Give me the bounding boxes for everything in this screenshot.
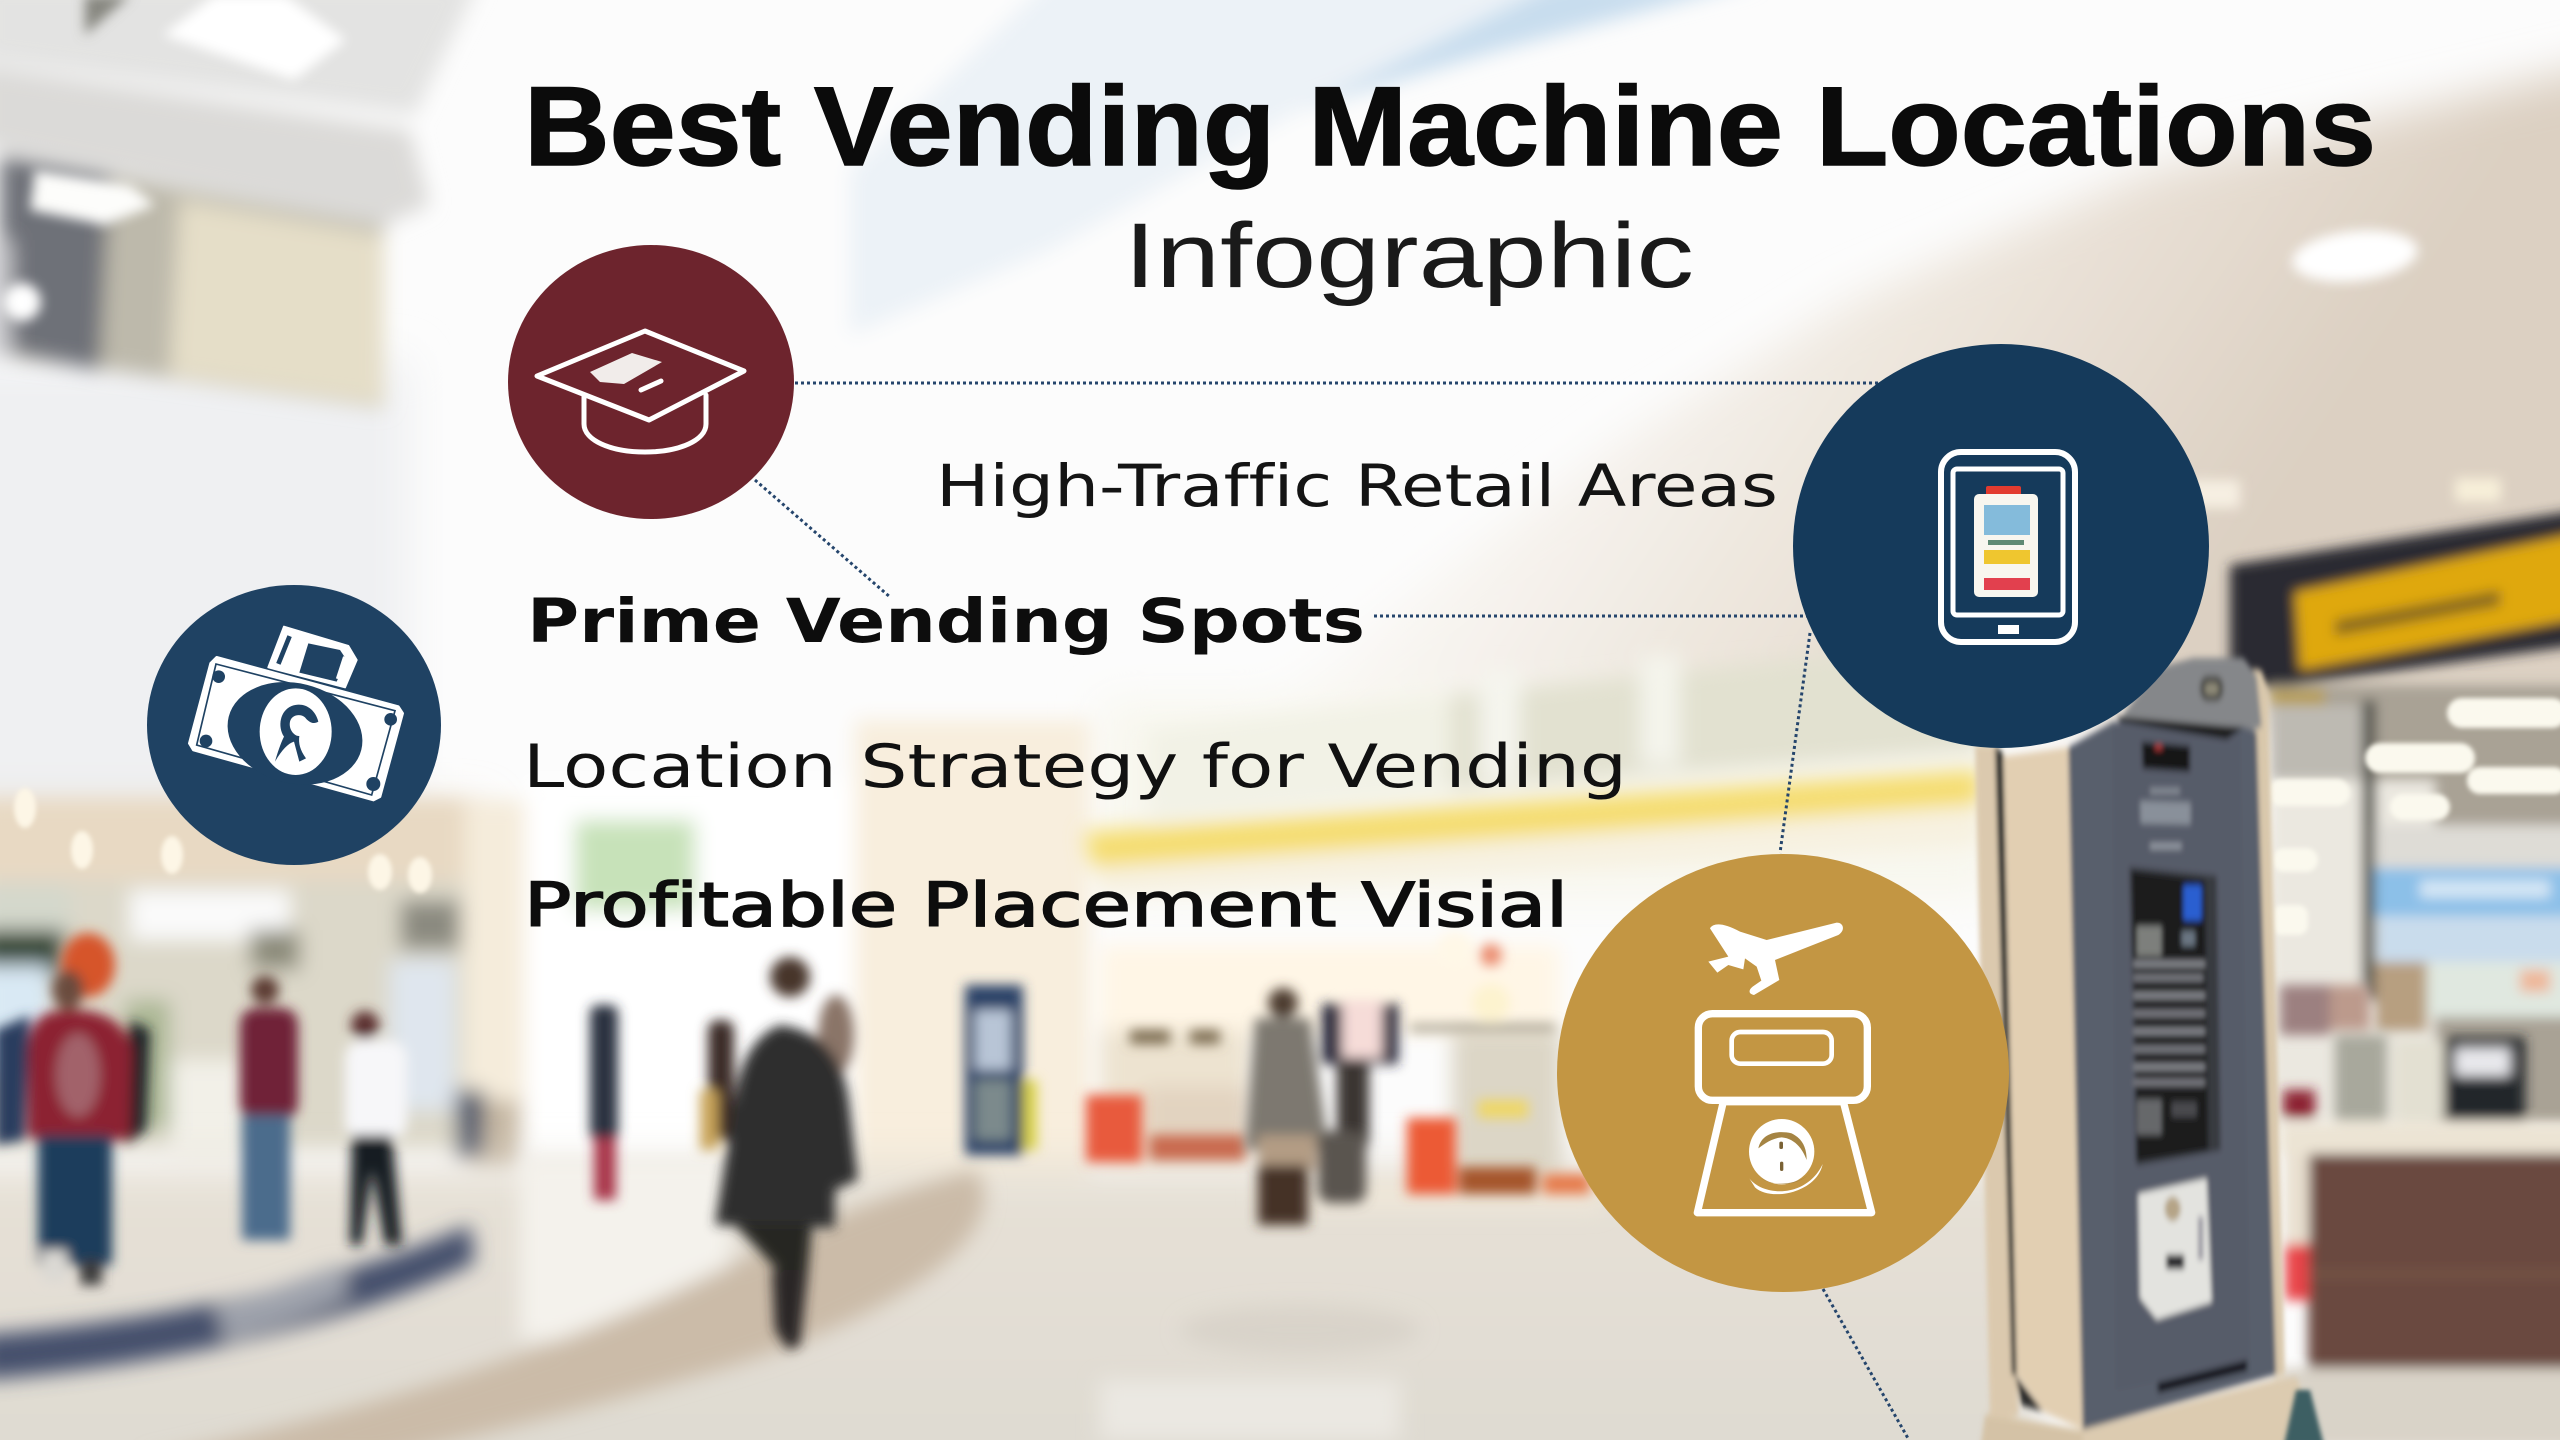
background: poster stand	[965, 985, 1037, 1155]
background: lower left ceiling, storefronts	[0, 720, 1090, 1190]
text: High-Traffic Retail Areas: High-Traffic Retail Areas	[936, 452, 1778, 520]
icon: gold airport kiosk circle	[1557, 854, 2009, 1292]
connector lines	[755, 383, 1909, 1440]
background: shop front with displays	[1100, 945, 1600, 1210]
text: Location Strategy for Vending: Location Strategy for Vending	[523, 732, 1627, 802]
background: ceiling spot lights	[14, 788, 432, 893]
background: kiosk base foot	[2284, 1390, 2324, 1440]
background: broad colour regions	[0, 60, 2560, 900]
text: Prime Vending Spots: Prime Vending Spots	[527, 586, 1365, 657]
icon: maroon graduation cap circle	[508, 245, 794, 519]
text: Profitable Placement Visial: Profitable Placement Visial	[524, 870, 1568, 941]
connector: scholar circle to tablet circle	[795, 382, 1880, 384]
background: vending kiosk	[1975, 658, 2318, 1440]
icon: tablet circle	[1793, 344, 2209, 748]
background: yellow band and upper windows	[1084, 640, 1980, 895]
connector: scholar circle to Prime Vending Spots	[755, 480, 890, 597]
background: ceiling light panels	[3, 0, 2501, 508]
connector: tablet circle to gold circle	[1780, 633, 1810, 853]
background: shoppers	[0, 933, 1398, 1350]
background: ceiling and window upper left	[0, 0, 1760, 408]
icon: navy money circle	[147, 585, 441, 865]
title: Best Vending Machine Locations	[524, 64, 2376, 189]
connector: gold circle down to the floor	[1823, 1289, 1909, 1440]
subtitle: Infographic	[1124, 205, 1694, 307]
connector: Prime Vending Spots to tablet circle	[1374, 614, 1808, 618]
background: right shop front	[2230, 510, 2560, 1125]
background: floor	[0, 1165, 2040, 1440]
